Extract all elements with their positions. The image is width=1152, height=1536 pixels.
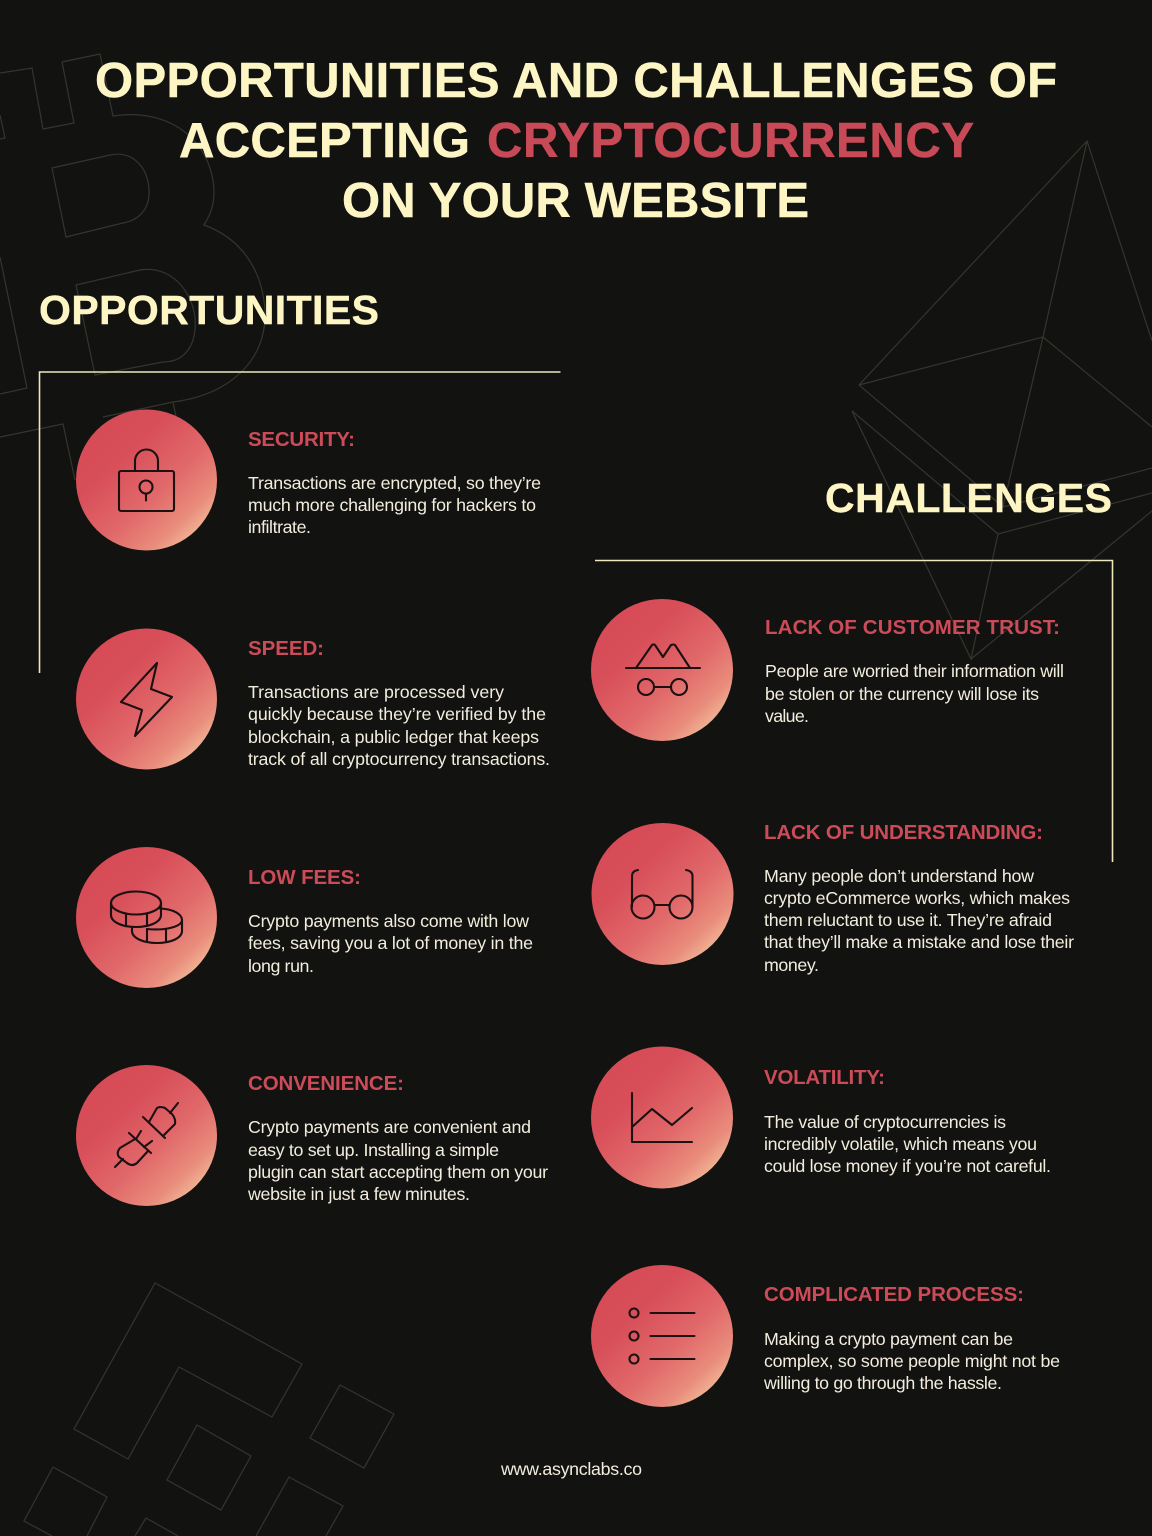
icon: glasses (592, 823, 734, 965)
text: lack of customer trust: value. (765, 706, 809, 726)
text: security: infiltrate. (248, 517, 311, 537)
text: volatility: incredibly volatile, which means you (764, 1134, 1037, 1154)
background watermark: binance outline (24, 1283, 394, 1536)
text: low fees: LOW FEES: (248, 866, 361, 889)
icon: checklist (591, 1265, 733, 1407)
text: security: SECURITY: (248, 428, 355, 451)
text: low fees: fees, saving you a lot of money in the (248, 933, 533, 953)
icon: coins (76, 847, 217, 988)
text: volatility: The value of cryptocurrencies is (764, 1112, 1006, 1132)
text: volatility (764, 1066, 1051, 1176)
title: OPPORTUNITIES AND CHALLENGES OF (95, 54, 1057, 108)
text: low fees: long run. (248, 956, 314, 976)
text: security: much more challenging for hackers to (248, 495, 536, 515)
text: complicated process (763, 1283, 1060, 1393)
text: security: Transactions are encrypted, so they’re (248, 473, 541, 493)
title: CRYPTOCURRENCY (487, 114, 974, 168)
text: speed: quickly because they’re verified by the (248, 704, 546, 724)
icon: line chart (591, 1046, 733, 1188)
text: security (248, 428, 541, 537)
text: speed: track of all cryptocurrency transactions. (248, 749, 550, 769)
text: convenience: CONVENIENCE: (248, 1072, 404, 1095)
text: convenience: plugin can start accepting them on your (248, 1162, 548, 1182)
panel: opportunities (76, 410, 550, 1206)
challenges frame line (595, 560, 1112, 862)
text: complicated process: willing to go through the hassle. (763, 1373, 1002, 1393)
text: volatility: could lose money if you’re not careful. (764, 1156, 1051, 1176)
text: speed (248, 637, 550, 769)
title: ACCEPTING (179, 114, 470, 168)
text: lack of understanding: LACK OF UNDERSTANDING: (764, 821, 1043, 844)
text: lack of understanding: crypto eCommerce works, which makes (764, 888, 1070, 908)
item: lack of customer trust (591, 599, 1064, 741)
text: lack of customer trust: LACK OF CUSTOMER TRUST: (765, 616, 1060, 639)
item: security (76, 410, 541, 550)
opportunities frame line (40, 372, 560, 673)
text: lack of customer trust: People are worried their information will (765, 661, 1064, 681)
icon: lightning bolt (76, 628, 217, 770)
text: convenience: Crypto payments are convenient and (248, 1117, 531, 1137)
background watermark: ethereum outline (852, 141, 1152, 659)
text: lack of customer trust: be stolen or the currency will lose its (765, 684, 1039, 704)
text: complicated process: COMPLICATED PROCESS: (764, 1283, 1024, 1306)
item: lack of understanding (592, 821, 1074, 975)
text: volatility: VOLATILITY: (764, 1066, 885, 1089)
text: complicated process: complex, so some people might not be (764, 1351, 1060, 1371)
footer url: www.asynclabs.co (500, 1459, 642, 1479)
text: lack of understanding (764, 821, 1074, 975)
item: speed (76, 628, 550, 770)
background watermark: bitcoin outline (0, 54, 265, 480)
item: low fees (76, 847, 533, 988)
item: complicated process (591, 1265, 1060, 1407)
text: lack of understanding: Many people don’t understand how (764, 866, 1034, 886)
text: speed: Transactions are processed very (248, 682, 504, 702)
title (95, 54, 1057, 228)
panel: challenges (591, 599, 1074, 1407)
text: speed: SPEED: (248, 637, 324, 660)
item: convenience (76, 1065, 548, 1206)
icon: padlock (76, 410, 217, 550)
text: lack of understanding: money. (764, 955, 819, 975)
text: convenience: easy to set up. Installing a simple (248, 1140, 499, 1160)
text: convenience (247, 1072, 548, 1204)
text: speed: blockchain, a public ledger that keeps (248, 727, 539, 747)
text: lack of understanding: them reluctant to use it. They’re afraid (764, 910, 1052, 930)
text: complicated process: Making a crypto payment can be (764, 1329, 1013, 1349)
item: volatility (591, 1046, 1051, 1188)
heading: opportunities: OPPORTUNITIES (39, 287, 379, 333)
title: ON YOUR WEBSITE (342, 174, 809, 228)
text: lack of understanding: that they’ll make a mistake and lose their (764, 932, 1074, 952)
icon: incognito hat and glasses (591, 599, 733, 741)
text: low fees (248, 866, 533, 976)
heading: challenges: CHALLENGES (825, 475, 1112, 521)
text: convenience: website in just a few minutes. (247, 1184, 470, 1204)
icon: plug (76, 1065, 217, 1206)
text: low fees: Crypto payments also come with low (248, 911, 529, 931)
text: lack of customer trust (765, 616, 1064, 726)
